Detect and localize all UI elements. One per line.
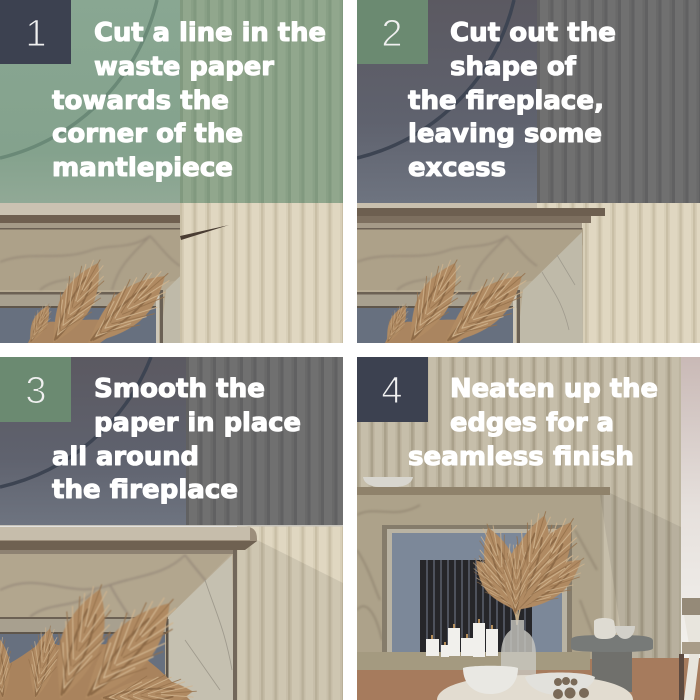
glass vase (501, 620, 536, 676)
mantel shelf (357, 487, 610, 495)
pampas grass (385, 259, 526, 343)
wallpaper background (237, 525, 343, 700)
side table (571, 618, 653, 692)
step 3 text: all around (52, 442, 199, 472)
adjacent plain wall (681, 357, 700, 658)
bowl on mantel (363, 477, 413, 487)
coffee table with bowls (437, 666, 633, 700)
step 4 text: seamless finish (408, 442, 634, 472)
step 1 text: corner of the (52, 119, 243, 149)
step 2 text: the fireplace, (408, 86, 604, 116)
wallpaper background (537, 203, 700, 343)
fireplace (0, 203, 180, 343)
pampas bouquet (472, 511, 585, 625)
step 1 text: waste paper (94, 52, 274, 82)
step 2 text: shape of (450, 52, 577, 82)
step 3 text (52, 374, 301, 505)
step 2 text: leaving some (408, 119, 602, 149)
pampas grass (28, 259, 170, 343)
number badge 2 (357, 0, 428, 64)
step 2 text: Cut out the (450, 18, 616, 48)
wall shadow (237, 540, 343, 700)
step 4 text (408, 374, 658, 472)
number badge 4: 4 (381, 370, 403, 412)
fireplace (0, 527, 257, 700)
number badge 1 (0, 0, 71, 64)
fireplace with mantel (357, 203, 605, 343)
grey overlay panel (0, 357, 343, 526)
number badge 1: 1 (25, 13, 47, 55)
grey overlay panel (357, 0, 700, 203)
finished wallpapered wall (357, 357, 681, 658)
number badge 3 (0, 357, 71, 422)
panel 3: smooth the paper (0, 357, 343, 700)
panel 4: finished room (357, 357, 700, 700)
candles (426, 619, 498, 657)
step 3 text: Smooth the (94, 374, 265, 404)
wood floor (357, 658, 700, 700)
number badge 2: 2 (381, 13, 403, 55)
cut line in paper (180, 225, 229, 240)
panel 1: cut a line (0, 0, 343, 359)
green overlay panel (0, 0, 343, 203)
step 2 text (408, 18, 616, 183)
number badge 4 (357, 357, 428, 422)
wallpaper background (180, 203, 343, 343)
number badge 3: 3 (25, 370, 47, 412)
chair (679, 598, 700, 700)
step 1 text: towards the (52, 86, 229, 116)
step 3 text: paper in place (94, 408, 301, 438)
fireplace surround (357, 495, 600, 670)
step 2 text: excess (408, 153, 506, 183)
step 4 text: edges for a (450, 408, 614, 438)
pampas grass (0, 577, 198, 700)
wall shadow (600, 493, 681, 658)
step 1 text (52, 18, 326, 183)
step 4 text: Neaten up the (450, 374, 658, 404)
step 3 text: the fireplace (52, 475, 238, 505)
step 1 text: mantlepiece (52, 153, 233, 183)
panel 2: cut out the shape (357, 0, 700, 359)
step 1 text: Cut a line in the (94, 18, 326, 48)
